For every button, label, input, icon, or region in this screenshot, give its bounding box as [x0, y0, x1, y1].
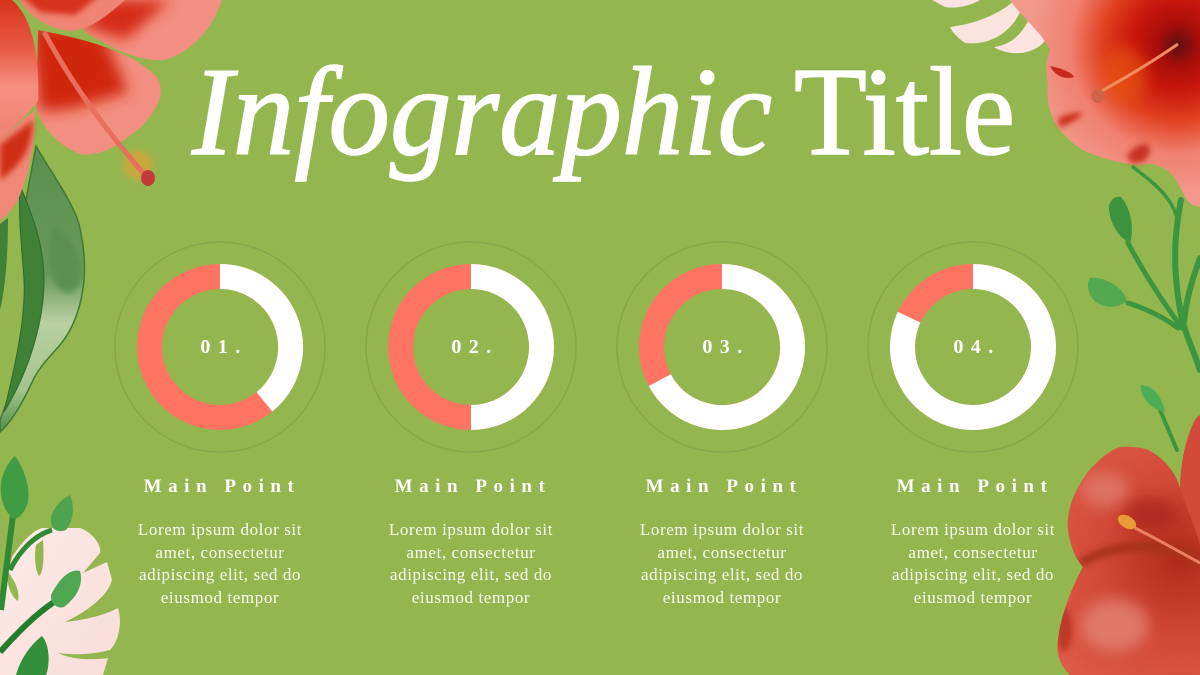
donut chart 01	[150, 276, 291, 418]
body text: amet, consectetur	[908, 543, 1038, 562]
body text: Lorem ipsum dolor sit	[138, 520, 302, 539]
body text: Lorem ipsum dolor sit	[891, 520, 1055, 539]
number 01: 01.	[200, 336, 248, 358]
number 02: 02.	[451, 336, 499, 358]
body text: eiusmod tempor	[161, 588, 279, 607]
stamen	[1115, 512, 1200, 563]
decoration: bottom-left monstera leaf and buds	[0, 456, 120, 675]
panel: point 1	[115, 242, 325, 607]
decoration: top-right monstera leaf	[932, 0, 1049, 53]
number 04: 04.	[953, 336, 1001, 358]
body text: amet, consectetur	[406, 543, 536, 562]
body text: eiusmod tempor	[914, 588, 1032, 607]
number 03: 03.	[702, 336, 750, 358]
panel: point 2	[366, 242, 576, 607]
heading: Main Point	[395, 476, 551, 497]
body text: Lorem ipsum dolor sit	[640, 520, 804, 539]
outer ring	[366, 242, 576, 452]
stamen	[44, 32, 155, 186]
donut chart 02	[400, 276, 542, 418]
decoration: right stems and buds	[1088, 167, 1200, 450]
body text	[640, 520, 804, 607]
body text: Lorem ipsum dolor sit	[389, 520, 553, 539]
body text: adipiscing elit, sed do	[390, 565, 552, 584]
title: Title	[794, 43, 1015, 182]
body text: amet, consectetur	[657, 543, 787, 562]
body text: eiusmod tempor	[412, 588, 530, 607]
body text	[389, 520, 553, 607]
decoration: top-left hibiscus flower	[0, 0, 222, 221]
green stems and buds	[0, 456, 81, 675]
decoration: top-right hibiscus flower	[1010, 0, 1200, 207]
panel: point 4	[868, 242, 1078, 607]
outer ring	[115, 242, 325, 452]
body text	[138, 520, 302, 607]
donut chart 03	[652, 276, 793, 418]
decoration: top-left leaf	[0, 146, 84, 432]
heading: Main Point	[144, 476, 300, 497]
decoration: bottom-right hibiscus flower	[1056, 415, 1200, 675]
stamen	[1091, 44, 1178, 103]
body text: eiusmod tempor	[663, 588, 781, 607]
outer ring	[868, 242, 1078, 452]
body text: adipiscing elit, sed do	[892, 565, 1054, 584]
body text: adipiscing elit, sed do	[641, 565, 803, 584]
outer ring	[617, 242, 827, 452]
donut chart 04	[902, 276, 1044, 418]
title: Infographic	[191, 43, 772, 182]
body text	[891, 520, 1055, 607]
heading: Main Point	[646, 476, 802, 497]
panel: point 3	[617, 242, 827, 607]
body text: amet, consectetur	[155, 543, 285, 562]
heading: Main Point	[897, 476, 1053, 497]
body text: adipiscing elit, sed do	[139, 565, 301, 584]
